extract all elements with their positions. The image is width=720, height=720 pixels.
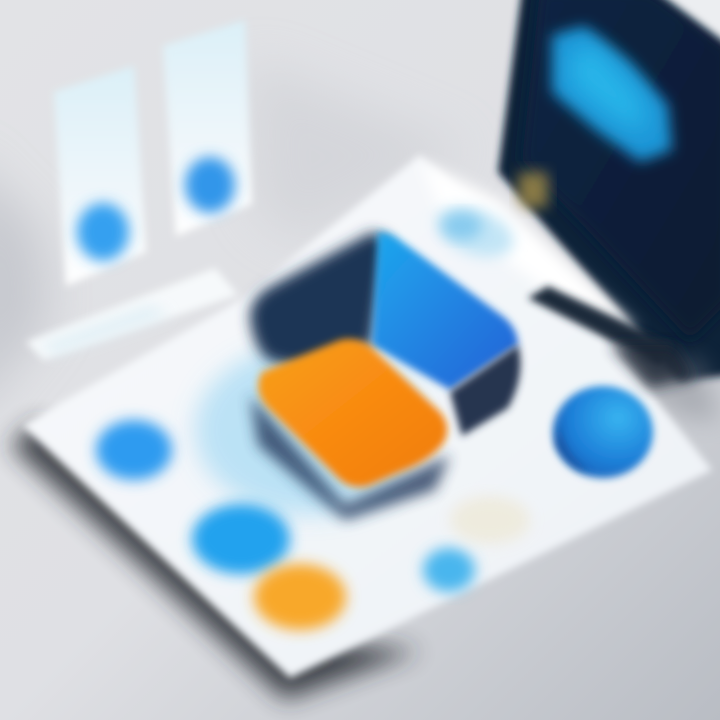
icon: blue circle bottom [192,504,290,574]
icon: amber badge on screen [518,172,548,208]
shadow under platform [10,420,420,700]
device on right: dark pill [528,286,672,366]
cube: orange front face [258,339,447,487]
icon: small blue circle [423,548,475,592]
light strip top [420,160,640,330]
icon: pale blue badge [430,198,520,266]
icon: blue circle on left card [77,203,129,261]
card: right [163,20,252,236]
cube: dark lower right [450,345,520,436]
card: left [54,66,146,286]
panel: upright cards [54,20,252,286]
icon: glowing blue shape on screen [552,26,672,162]
faint chart marks [450,496,530,544]
icon: blue circle on right card [185,157,235,213]
cube shadow [250,395,450,520]
icon: orange circle [254,564,346,630]
cube: blue right face [372,232,518,390]
icon: blue circle left [96,420,172,480]
raised bar on left [26,268,238,360]
cube chart [250,232,520,520]
icon: blue sphere [553,386,653,478]
panel: platform [22,155,712,678]
panel: platform widgets [96,345,653,630]
panel: monitor [498,0,720,382]
monitor corner [655,0,720,46]
cube: dark left face [250,232,388,368]
soft glow behind cube [195,345,425,515]
